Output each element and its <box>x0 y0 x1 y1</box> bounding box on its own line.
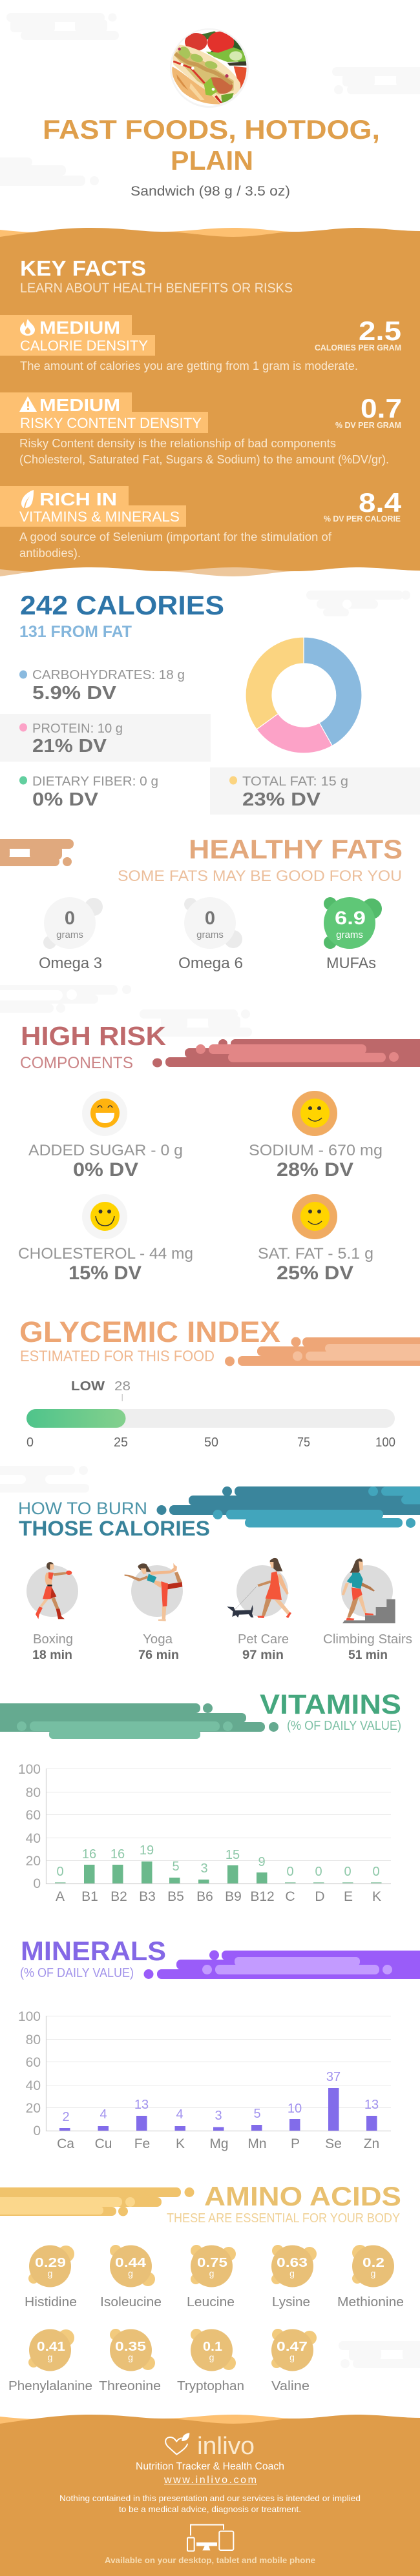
heading: how to burn: HOW TO BURN <box>18 1499 147 1518</box>
x axis labels: minerals: K <box>176 2136 185 2151</box>
bar values: minerals <box>62 2070 379 2124</box>
gauge axis labels: 50 <box>204 1435 218 1450</box>
gauge axis labels: 0 <box>26 1435 34 1450</box>
y axis labels: vitamins: 60 <box>26 1808 41 1823</box>
disclaimer: to be a medical advice, diagnosis or treatment. <box>119 2504 301 2514</box>
y axis labels: minerals: 60 <box>26 2055 41 2070</box>
heading: 242 calories: 242 CALORIES <box>20 590 224 620</box>
subheading: vitamins percent daily value: (% OF DAILY VALUE) <box>287 1719 401 1733</box>
risk item: cholesterol: 15% DV <box>68 1263 142 1284</box>
legend: protein <box>0 714 211 762</box>
activity: climbing stairs: 51 min <box>348 1648 388 1662</box>
amino acid: leucine: Leucine <box>187 2295 235 2309</box>
stat: omega 3: Omega 3 <box>39 955 102 972</box>
y axis labels: minerals: 100 <box>18 2009 41 2024</box>
amino acid: phenylalanine <box>8 2329 92 2393</box>
label: risky content density: RISKY CONTENT DENSITY <box>20 415 202 431</box>
risk item: sodium <box>249 1091 383 1181</box>
banner: how to burn <box>156 1486 420 1528</box>
amino acid: lysine: Lysine <box>272 2295 310 2309</box>
x axis labels: minerals: P <box>291 2136 300 2151</box>
heading: glycemic index: GLYCEMIC INDEX <box>19 1315 280 1348</box>
amino acid: leucine: g <box>209 2268 214 2278</box>
card: calorie density <box>0 315 401 372</box>
amino acid: histidine: g <box>48 2268 52 2278</box>
legend: carbohydrates: 5.9% DV <box>32 683 117 704</box>
bar chart: vitamins <box>18 1762 391 1904</box>
risk item: saturated fat: 25% DV <box>277 1263 353 1284</box>
heading: minerals: MINERALS <box>21 1936 166 1966</box>
amino acid: valine: Valine <box>271 2379 310 2393</box>
bar chart: minerals <box>18 2009 391 2151</box>
rating: medium: MEDIUM <box>39 395 120 415</box>
tagline: Nutrition Tracker & Health Coach <box>136 2461 284 2472</box>
x axis labels: vitamins: B2 <box>110 1889 127 1904</box>
y axis labels: minerals: 40 <box>26 2078 41 2093</box>
activity: pet care: Pet Care <box>238 1632 289 1647</box>
description: risky content density: Risky Content density is the relationship of bad components <box>19 437 336 450</box>
bar values: vitamins: 19 <box>140 1843 154 1858</box>
y axis labels: vitamins: 100 <box>18 1762 41 1777</box>
figure: woman walking dog <box>227 1558 291 1618</box>
heading: amino acids: AMINO ACIDS <box>204 2181 401 2211</box>
subheading: healthy fats: SOME FATS MAY BE GOOD FOR YOU <box>118 867 402 885</box>
figure: woman climbing stairs <box>342 1559 395 1623</box>
website link: www.inlivo.com <box>163 2475 257 2486</box>
bar values: minerals: 3 <box>215 2109 222 2123</box>
gauge marker: low 28: 28 <box>114 1379 131 1394</box>
gauge marker: low 28: LOW <box>71 1379 105 1394</box>
y axis labels: vitamins: 80 <box>26 1785 41 1800</box>
glycemic gauge <box>26 1379 395 1450</box>
y axis labels: vitamins: 20 <box>26 1854 41 1869</box>
x axis labels: vitamins: B3 <box>139 1889 156 1904</box>
activity: pet care <box>227 1558 291 1662</box>
logo: inlivo <box>165 2433 255 2460</box>
legend: dietary fiber: 0% DV <box>32 789 99 810</box>
bar values: minerals: 5 <box>253 2107 261 2121</box>
description: vitamins and minerals <box>19 531 332 560</box>
icon: warning triangle <box>19 396 37 412</box>
bars: vitamins <box>55 1861 381 1883</box>
amino acid: phenylalanine: g <box>48 2352 52 2362</box>
y axis labels: vitamins: 0 <box>33 1876 41 1891</box>
x axis labels: vitamins: B12 <box>250 1889 275 1904</box>
unit: percent DV per gram: % DV PER GRAM <box>335 420 401 430</box>
amino acid: valine: 0.47 <box>277 2340 308 2354</box>
x axis labels: minerals: Zn <box>364 2136 379 2151</box>
x axis labels: vitamins: K <box>372 1889 381 1904</box>
heading: those calories: THOSE CALORIES <box>19 1517 210 1540</box>
amino acid: tryptophan <box>177 2329 244 2393</box>
donut chart: macronutrients <box>246 637 362 753</box>
amino acid: isoleucine: 0.44 <box>115 2256 147 2270</box>
amino acid: histidine: Histidine <box>25 2295 77 2309</box>
subheading: 131 from fat: 131 FROM FAT <box>19 623 132 641</box>
serving size subtitle: Sandwich (98 g / 3.5 oz) <box>131 184 290 199</box>
gauge axis labels <box>26 1435 395 1450</box>
activity: yoga: 76 min <box>138 1648 179 1662</box>
risk item: added sugar <box>28 1091 183 1181</box>
stat: MUFAs: 6.9 <box>335 908 366 929</box>
banner: vitamins <box>0 1703 278 1739</box>
amino acid: leucine <box>187 2245 236 2309</box>
heading: high risk: HIGH RISK <box>21 1021 166 1051</box>
legend: total fat <box>210 767 420 815</box>
rating: medium: MEDIUM <box>39 318 120 338</box>
risk item: sodium: 28% DV <box>277 1159 353 1181</box>
legend: total fat: TOTAL FAT: 15 g <box>242 775 348 789</box>
logo: inlivo: inlivo <box>197 2433 255 2460</box>
y axis labels: minerals: 20 <box>26 2101 41 2116</box>
amino acid: methionine: 0.2 <box>362 2256 384 2270</box>
banner: glycemic index <box>225 1337 420 1366</box>
x axis labels: vitamins: B6 <box>196 1889 213 1904</box>
amino acid: methionine <box>337 2245 404 2309</box>
legend: carbohydrates: CARBOHYDRATES: 18 g <box>32 668 185 682</box>
title: FAST FOODS, HOTDOG, <box>43 114 380 145</box>
title: PLAIN <box>171 145 253 176</box>
heading: vitamins: VITAMINS <box>260 1689 401 1720</box>
bar values: vitamins: 16 <box>110 1847 125 1861</box>
x axis labels: vitamins: B1 <box>81 1889 98 1904</box>
title <box>43 114 380 176</box>
x axis labels: vitamins: C <box>285 1889 295 1904</box>
x axis labels: vitamins: A <box>56 1889 65 1904</box>
label: vitamins and minerals: VITAMINS & MINERALS <box>19 509 180 525</box>
description: vitamins and minerals: A good source of Selenium (important for the stimulation of <box>19 531 332 543</box>
card: rich in vitamins and minerals <box>0 486 402 560</box>
bar values: vitamins: 9 <box>258 1855 266 1869</box>
gauge axis labels: 75 <box>297 1435 310 1450</box>
risk item: saturated fat: SAT. FAT - 5.1 g <box>258 1245 373 1263</box>
amino acid: isoleucine: g <box>128 2268 133 2278</box>
amino acid: phenylalanine: Phenylalanine <box>8 2379 92 2393</box>
gauge axis labels: 25 <box>114 1435 128 1450</box>
amino acid: isoleucine: Isoleucine <box>100 2295 162 2309</box>
activity: yoga <box>125 1563 183 1662</box>
y axis labels: minerals: 80 <box>26 2033 41 2047</box>
y axis labels: minerals: 0 <box>33 2124 41 2138</box>
bar values: minerals: 13 <box>134 2098 149 2112</box>
stat: omega 6: 0 <box>205 908 215 929</box>
stat: omega 3: 0 <box>65 908 75 929</box>
figure: boxer <box>36 1562 72 1619</box>
bar values: vitamins: 15 <box>226 1848 240 1862</box>
legend: protein: PROTEIN: 10 g <box>32 722 123 736</box>
gauge marker: low 28 <box>71 1379 131 1401</box>
activity: boxing <box>26 1562 78 1662</box>
gauge axis labels: 100 <box>375 1435 395 1450</box>
banner: healthy fats <box>0 839 74 866</box>
amino acid: histidine <box>25 2245 77 2309</box>
bar values: vitamins: 0 <box>286 1865 294 1879</box>
food photo: hotdog <box>170 28 249 108</box>
bars: minerals <box>59 2088 377 2131</box>
value: 8.4: 8.4 <box>359 487 402 518</box>
x axis labels: minerals: Ca <box>57 2136 74 2151</box>
activity: boxing: 18 min <box>32 1648 72 1662</box>
figure: yoga pose <box>125 1563 182 1621</box>
activity: climbing stairs: Climbing Stairs <box>323 1632 412 1647</box>
subheading: components: COMPONENTS <box>20 1054 133 1072</box>
amino acid: threonine: 0.35 <box>115 2340 146 2354</box>
bar values: vitamins: 16 <box>82 1847 96 1861</box>
subheading: key facts: LEARN ABOUT HEALTH BENEFITS OR RISKS <box>20 281 293 296</box>
disclaimer: Nothing contained in this presentation and our services is intended or implied <box>59 2493 361 2503</box>
stat: omega 6: Omega 6 <box>178 955 243 972</box>
bar values: minerals: 37 <box>326 2070 341 2084</box>
x axis labels: vitamins: D <box>315 1889 325 1904</box>
bar values: vitamins: 0 <box>315 1865 322 1879</box>
amino acid: isoleucine <box>100 2245 162 2309</box>
unit: percent DV per calorie: % DV PER CALORIE <box>324 514 401 523</box>
amino acid: threonine: Threonine <box>99 2379 161 2393</box>
x axis labels: vitamins: B9 <box>225 1889 242 1904</box>
panel: key facts <box>0 228 420 600</box>
banner: minerals <box>143 1951 420 1979</box>
amino acid: lysine <box>271 2245 317 2309</box>
amino acid: methionine: g <box>371 2268 375 2278</box>
bar values: vitamins: 0 <box>56 1865 64 1879</box>
subheading: amino acids: THESE ARE ESSENTIAL FOR YOUR BODY <box>167 2211 400 2226</box>
availability note: Available on your desktop, tablet and mobile phone <box>105 2555 315 2565</box>
bar values: minerals: 13 <box>364 2098 379 2112</box>
risk item: cholesterol: CHOLESTEROL - 44 mg <box>18 1245 193 1263</box>
amino acid: lysine: g <box>289 2268 295 2278</box>
y axis labels: vitamins <box>18 1762 41 1891</box>
banner: amino acids <box>0 2187 194 2216</box>
amino acid: tryptophan: Tryptophan <box>177 2379 244 2393</box>
stat: MUFAs: MUFAs <box>326 955 376 972</box>
footer panel <box>0 2415 420 2576</box>
description: calorie density: The amount of calories you are getting from 1 gram is moderate. <box>20 360 358 372</box>
bar values: minerals: 4 <box>176 2107 184 2122</box>
x axis labels: minerals: Mn <box>247 2136 267 2151</box>
amino acid: phenylalanine: 0.41 <box>37 2340 65 2354</box>
stat: omega 3: grams <box>56 929 83 940</box>
card: risky content density <box>0 392 402 466</box>
activity: pet care: 97 min <box>242 1648 284 1662</box>
amino acid: valine: g <box>289 2352 295 2362</box>
description: vitamins and minerals: antibodies). <box>19 547 81 560</box>
y axis labels: minerals <box>18 2009 41 2138</box>
heading: key facts: KEY FACTS <box>20 256 146 280</box>
risk item: saturated fat <box>258 1194 373 1284</box>
stat: omega 6: grams <box>196 929 224 940</box>
risk item: added sugar: 0% DV <box>73 1159 138 1181</box>
amino acid: histidine: 0.29 <box>35 2256 66 2270</box>
label: calorie density: CALORIE DENSITY <box>20 338 148 354</box>
bar values: vitamins: 0 <box>372 1865 380 1879</box>
risk item: sodium: SODIUM - 670 mg <box>249 1142 383 1159</box>
icon: devices <box>187 2525 233 2551</box>
legend: protein: 21% DV <box>32 736 107 756</box>
risk item: cholesterol <box>18 1194 193 1284</box>
y axis labels: vitamins: 40 <box>26 1831 41 1846</box>
x axis labels: minerals <box>57 2136 379 2151</box>
bar values: vitamins: 3 <box>200 1861 208 1876</box>
activity: yoga: Yoga <box>143 1632 173 1647</box>
description: risky content density: (Cholesterol, Saturated Fat, Sugars & Sodium) to the amount (%DV/gr). <box>19 453 389 466</box>
stat: omega 3 <box>39 897 103 972</box>
amino acid: threonine <box>99 2329 161 2393</box>
legend: dietary fiber <box>19 775 158 810</box>
subheading: minerals percent daily value: (% OF DAILY VALUE) <box>20 1966 134 1980</box>
amino acid: methionine: Methionine <box>337 2295 404 2309</box>
value: 2.5: 2.5 <box>359 316 401 346</box>
amino acid: lysine: 0.63 <box>277 2256 308 2270</box>
banner: high risk <box>152 1039 420 1068</box>
risk item: added sugar: ADDED SUGAR - 0 g <box>28 1142 183 1159</box>
unit: calories per gram: CALORIES PER GRAM <box>315 343 401 352</box>
amino acid: tryptophan: 0.1 <box>203 2340 222 2354</box>
legend: dietary fiber: DIETARY FIBER: 0 g <box>32 775 158 789</box>
heading: healthy fats: HEALTHY FATS <box>189 834 403 864</box>
legend: carbohydrates <box>19 668 185 704</box>
amino acid: valine <box>271 2329 317 2393</box>
x axis labels: vitamins: E <box>344 1889 353 1904</box>
amino acid: tryptophan: g <box>209 2352 214 2362</box>
value: 0.7: 0.7 <box>361 393 402 423</box>
x axis labels: vitamins <box>56 1889 381 1904</box>
x axis labels: vitamins: B5 <box>167 1889 184 1904</box>
bar values: minerals: 2 <box>62 2110 70 2124</box>
x axis labels: minerals: Cu <box>95 2136 112 2151</box>
x axis labels: minerals: Mg <box>209 2136 229 2151</box>
stat: omega 6 <box>178 897 243 972</box>
activity: climbing stairs <box>323 1559 412 1662</box>
x axis labels: minerals: Fe <box>134 2136 150 2151</box>
stat: MUFAs <box>324 897 382 972</box>
stat: MUFAs: grams <box>336 929 363 940</box>
bar values: minerals: 10 <box>288 2102 302 2116</box>
legend: total fat: 23% DV <box>242 789 321 810</box>
icon: flame <box>20 319 35 336</box>
bar values: vitamins: 0 <box>344 1865 352 1879</box>
bar values: vitamins: 5 <box>172 1860 180 1874</box>
amino acid: threonine: g <box>128 2352 133 2362</box>
bar values: vitamins <box>56 1843 380 1879</box>
disclaimer <box>59 2493 361 2514</box>
amino acid: leucine: 0.75 <box>197 2256 227 2270</box>
subheading: estimated for this food: ESTIMATED FOR THIS FOOD <box>20 1348 215 1365</box>
description: risky content density <box>19 437 389 466</box>
activity: boxing: Boxing <box>33 1632 73 1647</box>
bar values: minerals: 4 <box>100 2107 107 2122</box>
x axis labels: minerals: Se <box>325 2136 342 2151</box>
rating: rich in: RICH IN <box>39 489 117 509</box>
icon: leaf <box>21 490 34 508</box>
